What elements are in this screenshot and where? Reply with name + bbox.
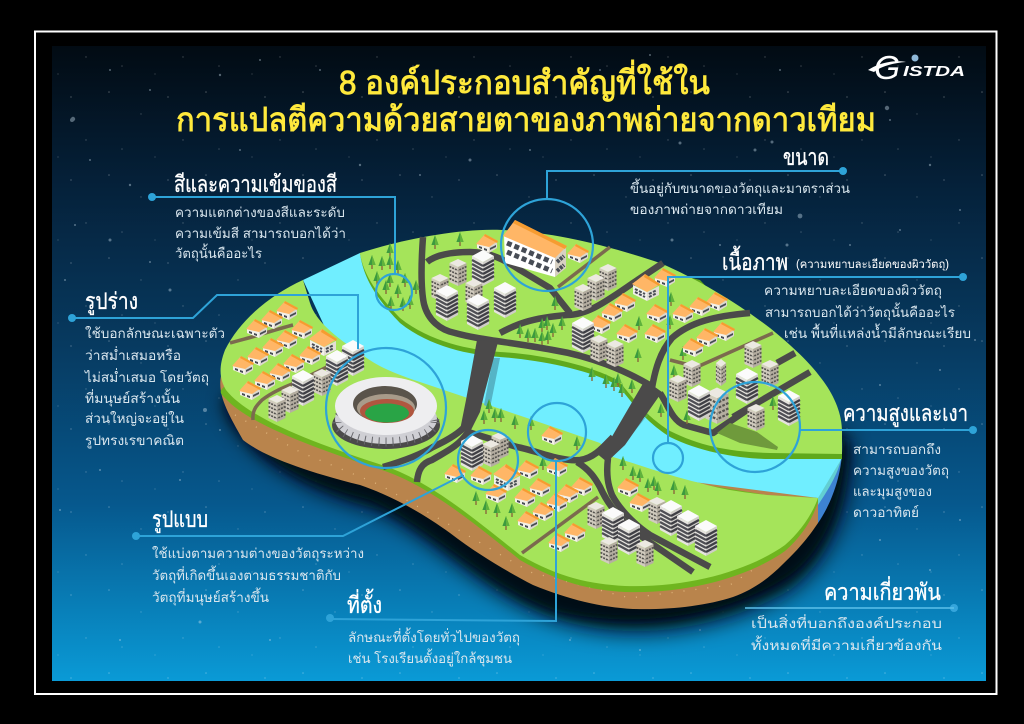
upper island houses and towers — [432, 220, 800, 431]
heading: colour and tone: สีและความเข้มของสี — [174, 171, 337, 197]
night sky panel — [52, 46, 986, 681]
callout: height and shadow — [710, 382, 977, 520]
description: pattern: ใช้แบ่งตามความต่างของวัตถุระหว่าง — [152, 545, 364, 562]
stars — [59, 54, 976, 651]
description: shape: ที่มนุษย์สร้างนั้น — [85, 388, 180, 407]
description: shape — [84, 325, 225, 449]
description: size: ของภาพถ่ายจากดาวเทียม — [630, 202, 783, 217]
lower island surface — [221, 280, 818, 586]
upper island surface — [360, 230, 842, 454]
roads — [230, 237, 810, 572]
callout: location — [326, 403, 586, 667]
heading: texture: เนื้อภาพ — [722, 246, 788, 275]
tall tower — [706, 359, 728, 424]
description: location — [348, 627, 520, 667]
callout: association — [745, 576, 958, 653]
sub-heading: texture: (ความหยาบละเอียดของผิววัตถุ) — [796, 258, 949, 271]
description: height and shadow: สามารถบอกถึง — [853, 442, 941, 457]
water side blue — [818, 440, 842, 523]
description: pattern — [152, 545, 364, 606]
description: association: ทั้งหมดที่มีความเกี่ยวข้องกัน — [751, 635, 942, 653]
description: height and shadow: ความสูงของวัตถุ — [853, 463, 949, 479]
description: texture: ความหยาบละเอียดของผิววัตถุ — [764, 283, 942, 299]
lower island houses and towers — [444, 426, 717, 567]
large school building — [503, 220, 567, 277]
heading: pattern: รูปแบบ — [152, 506, 208, 533]
description: colour and tone: ความเข้มสี สามารถบอกได้ว่า — [175, 226, 346, 241]
soil speckles — [235, 415, 790, 598]
description: association: เป็นสิ่งที่บอกถึงองค์ประกอบ — [751, 614, 942, 631]
trees — [368, 232, 777, 530]
description: size — [630, 178, 850, 217]
logo: GISTDA: G — [874, 49, 900, 86]
description: size: ขึ้นอยู่กับขนาดของวัตถุและมาตราส่วน — [630, 178, 850, 197]
callout: texture — [653, 246, 971, 473]
description: height and shadow — [853, 442, 949, 520]
stadium — [332, 377, 440, 449]
description: texture: สามารถบอกได้ว่าวัตถุนั้นคืออะไร — [765, 302, 955, 321]
lower island edge — [221, 385, 818, 592]
description: height and shadow: ดาวอาทิตย์ — [853, 504, 919, 520]
river water — [303, 253, 842, 498]
description: shape: ไม่สม่ำเสมอ โดยวัตถุ — [84, 368, 209, 386]
description: pattern: วัตถุที่เกิดขึ้นเองตามธรรมชาติกับ — [152, 565, 341, 584]
callout: size — [501, 144, 850, 291]
left lobe houses and towers — [232, 301, 364, 422]
description: shape: รูปทรงเรขาคณิต — [85, 433, 184, 449]
heading: location: ที่ตั้ง — [347, 589, 382, 618]
title — [176, 60, 876, 138]
island base — [220, 230, 842, 609]
description: shape: ว่าสม่ำเสมอหรือ — [85, 346, 181, 363]
description: colour and tone: วัตถุนั้นคืออะไร — [175, 243, 262, 262]
heading: association: ความเกี่ยวพัน — [824, 576, 941, 605]
description: texture — [764, 283, 971, 341]
description: location: เช่น โรงเรียนตั้งอยู่ใกล้ชุมชน — [348, 648, 512, 667]
callout: shape — [68, 288, 446, 468]
logo: GISTDA — [868, 49, 965, 86]
logo: GISTDA: ISTDA — [903, 63, 965, 80]
bridge road west — [460, 340, 498, 432]
description: height and shadow: และมุมสูงของ — [853, 484, 932, 500]
description: texture: เช่น พื้นที่แหล่งน้ำมีลักษณะเรียบ — [784, 323, 971, 341]
description: location: ลักษณะที่ตั้งโดยทั่วไปของวัตถุ — [348, 627, 520, 646]
title line 1: 8 องค์ประกอบสำคัญที่ใช้ใน — [339, 60, 710, 101]
heading: size: ขนาด — [783, 144, 829, 170]
fine star dust — [52, 46, 986, 681]
callout: colour and tone — [148, 171, 412, 310]
callout: pattern — [132, 430, 518, 606]
soil side — [220, 372, 818, 609]
description: colour and tone: ความแตกต่างของสีและระดับ — [175, 205, 345, 220]
title line 2: การแปลตีความด้วยสายตาของภาพถ่ายจากดาวเทียม — [176, 101, 876, 138]
bridge shadows — [484, 358, 650, 450]
tower shadow — [717, 423, 778, 450]
heading: shape: รูปร่าง — [85, 288, 138, 315]
heading: height and shadow: ความสูงและเงา — [843, 400, 968, 427]
upper island edge — [360, 230, 842, 459]
description: shape: ใช้บอกลักษณะเฉพาะตัว — [85, 325, 225, 341]
description: colour and tone — [175, 205, 346, 262]
water side teal — [818, 452, 842, 505]
description: shape: ส่วนใหญ่จะอยู่ใน — [85, 410, 184, 427]
description: association — [751, 614, 942, 653]
description: pattern: วัตถุที่มนุษย์สร้างขึ้น — [152, 587, 269, 606]
island drop shadow — [225, 300, 850, 631]
bridge road east — [595, 380, 662, 462]
